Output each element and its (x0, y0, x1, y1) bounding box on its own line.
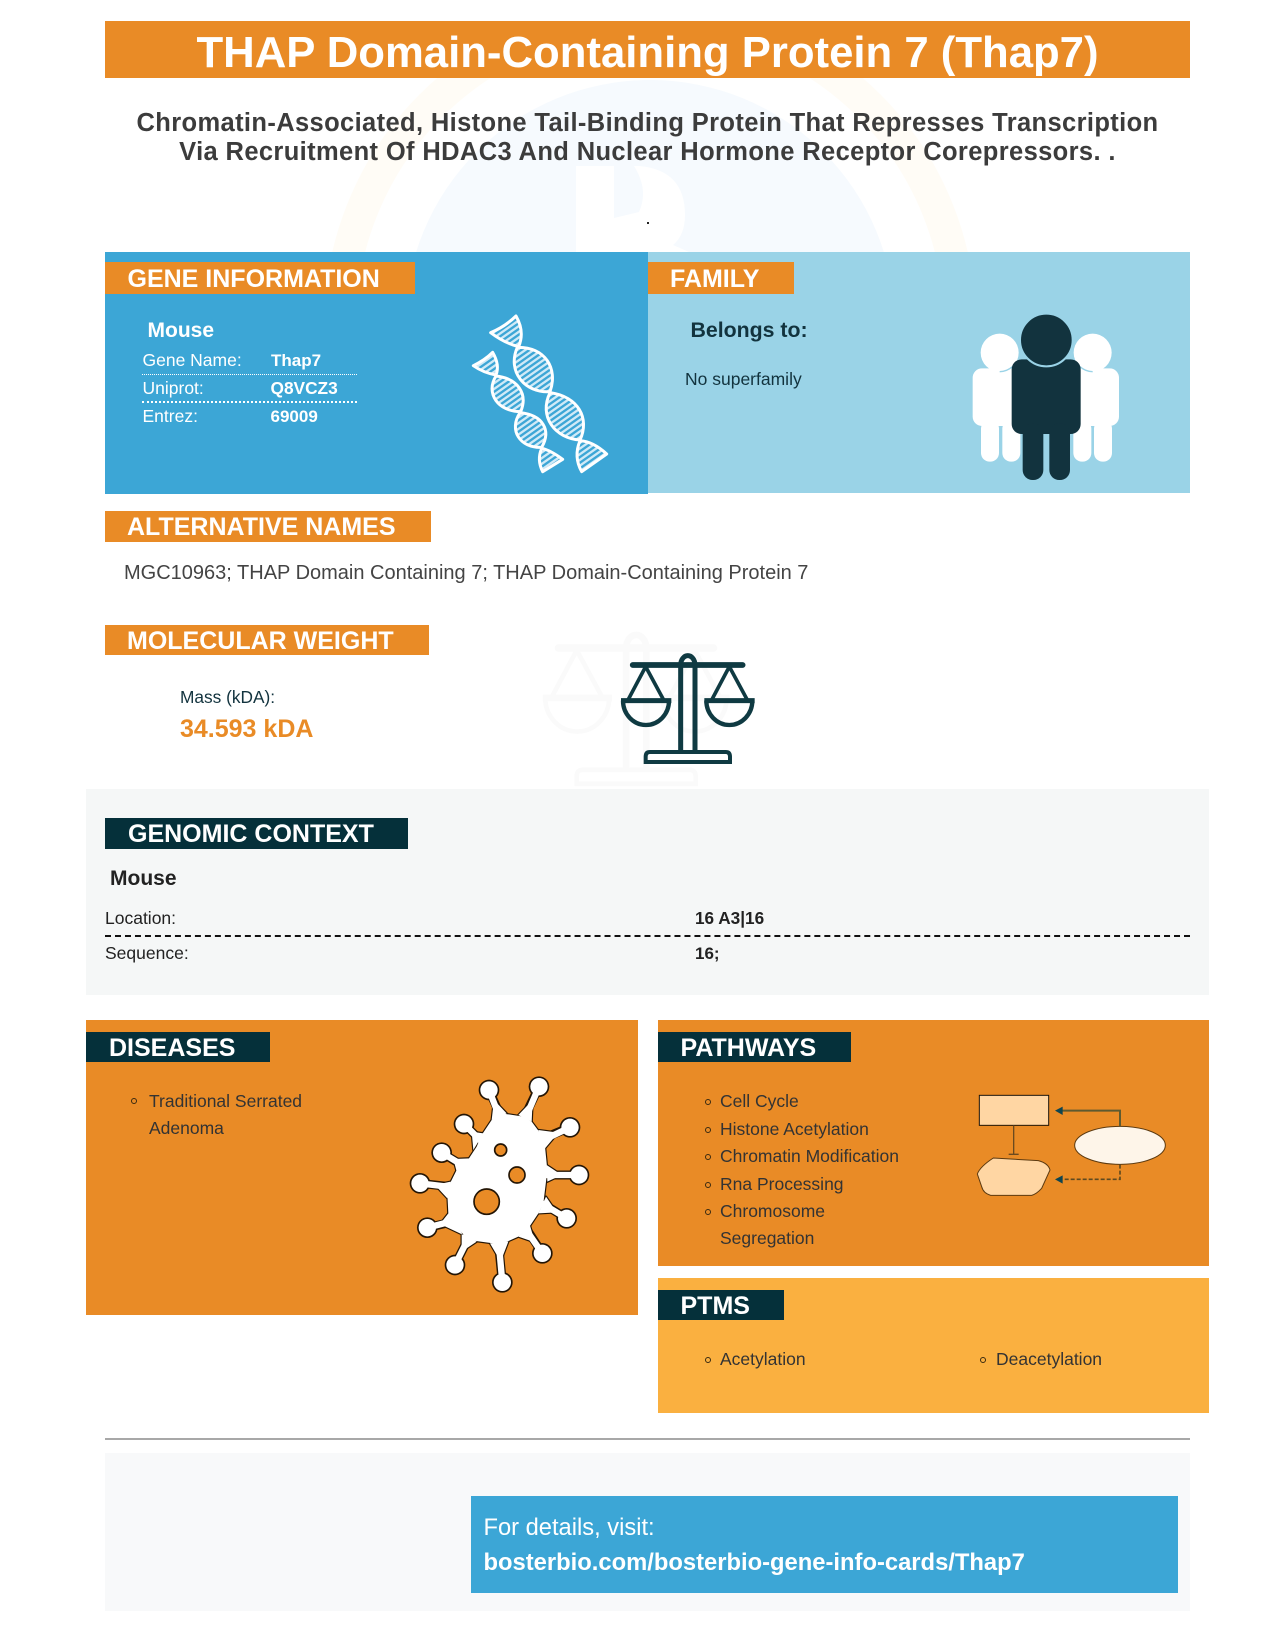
sequence label: Sequence: (105, 942, 189, 962)
sequence value: 16; (695, 944, 720, 962)
heading: ptms: PTMS (680, 1292, 750, 1320)
panel: footer (105, 1453, 1190, 1611)
icon: dna helix (472, 314, 608, 474)
alternative names text: MGC10963; THAP Domain Containing 7; THAP Domain-Containing Protein 7 (124, 562, 808, 584)
panel: gene information (105, 252, 648, 494)
pathway list: Histone Acetylation (720, 1119, 869, 1139)
gene name value: Thap7 (271, 351, 321, 370)
heading: family (648, 262, 794, 294)
icon: virus (410, 1076, 590, 1293)
location label: Location: (105, 908, 176, 928)
pathway list: Chromatin Modification (720, 1146, 899, 1166)
panel: ptms (658, 1278, 1209, 1413)
location value: 16 A3|16 (695, 908, 764, 928)
title: THAP Domain-Containing Protein 7 (Thap7) (196, 28, 1099, 77)
panel: genomic context (86, 789, 1208, 995)
heading: genomic context: GENOMIC CONTEXT (128, 820, 374, 848)
pathway list: Chromosome (720, 1201, 825, 1221)
heading: pathways: PATHWAYS (680, 1034, 816, 1062)
pathway list: Segregation (720, 1228, 814, 1248)
small dot (647, 222, 649, 224)
watermark logo (332, 78, 968, 252)
details label: For details, visit: (484, 1515, 655, 1541)
icon: ghost balance scale (500, 610, 780, 800)
species: mouse: Mouse (148, 319, 214, 342)
icon: balance scale (620, 653, 755, 764)
uniprot value: Q8VCZ3 (270, 378, 338, 398)
heading: family: FAMILY (670, 265, 759, 293)
subtitle: Chromatin-Associated, Histone Tail-Binding Protein That Represses Transcription (136, 109, 1158, 137)
species: mouse: Mouse (110, 866, 177, 890)
heading: pathways (658, 1032, 851, 1062)
entrez row: Entrez: (142, 406, 198, 426)
belongs to label: Belongs to: (690, 318, 808, 342)
uniprot row: Uniprot: (142, 378, 204, 398)
icon: people group (972, 314, 1119, 480)
pathway list (705, 1091, 899, 1248)
panel: pathways (658, 1020, 1209, 1266)
disease list (131, 1090, 302, 1138)
pathway list: Cell Cycle (720, 1091, 799, 1111)
subtitle: Via Recruitment Of HDAC3 And Nuclear Hormone Receptor Corepressors. . (179, 138, 1116, 166)
disease list: Traditional Serrated (149, 1090, 302, 1110)
details url: bosterbio.com/bosterbio-gene-info-cards/Thap7 (484, 1549, 1025, 1576)
pathway list: Rna Processing (720, 1174, 844, 1194)
panel: family (648, 252, 1190, 493)
mass value: 34.593 kDA (180, 715, 313, 743)
ptm list item: deacetylation: Deacetylation (996, 1348, 1102, 1368)
heading: alternative names: ALTERNATIVE NAMES (127, 513, 396, 541)
mass label: Mass (kDA): (180, 686, 275, 706)
ptm list item: acetylation: Acetylation (720, 1348, 806, 1368)
heading: molecular weight: MOLECULAR WEIGHT (127, 627, 394, 655)
disease list: Adenoma (149, 1118, 224, 1138)
superfamily value: No superfamily (685, 368, 802, 388)
callout: details link (471, 1496, 1178, 1593)
icon: pathway diagram (976, 1094, 1166, 1196)
heading: diseases: DISEASES (109, 1034, 235, 1062)
subtitle (136, 109, 1158, 166)
entrez value: 69009 (270, 407, 318, 426)
heading: gene information: GENE INFORMATION (128, 265, 380, 293)
heading: diseases (86, 1032, 270, 1062)
gene name row: Gene Name: (142, 350, 242, 370)
heading: ptms (658, 1290, 784, 1320)
panel: diseases (86, 1020, 638, 1315)
